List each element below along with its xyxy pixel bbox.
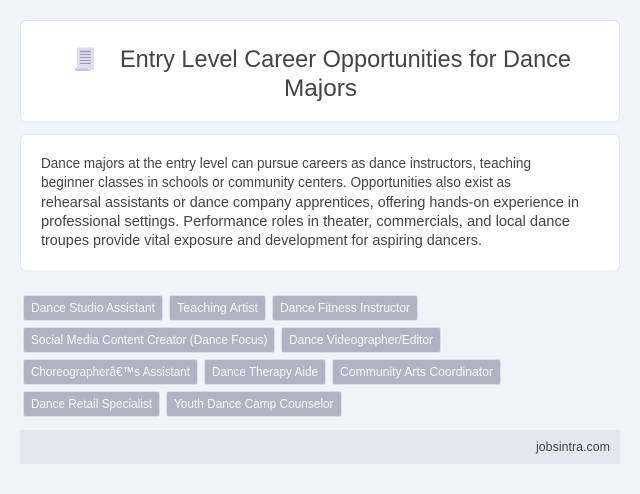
tag: Teaching Artist: Teaching Artist xyxy=(177,301,259,315)
tag: Youth Dance Camp Counselor xyxy=(166,392,342,416)
tag: Social Media Content Creator xyxy=(24,328,274,352)
tag: Choreographer's Assistant: Choreographerâ€™s Assistant xyxy=(31,365,190,379)
title: Majors xyxy=(284,75,357,102)
tag: Dance Fitness Instructor xyxy=(272,296,418,320)
tag: Dance Studio Assistant: Dance Studio Assistant xyxy=(31,301,156,315)
tag: Dance Therapy Aide xyxy=(204,360,326,384)
footer: jobsintra.com xyxy=(535,440,610,454)
panel: description xyxy=(20,134,620,271)
tag: Community Arts Coordinator: Community Arts Coordinator xyxy=(340,365,493,379)
tag: Dance Studio Assistant xyxy=(24,296,162,320)
panel: description: professional settings. Performance roles in theater, commercials, and local dance xyxy=(41,214,570,230)
panel: description: troupes provide vital exposure and development for aspiring dancers. xyxy=(41,233,482,249)
panel: title card xyxy=(20,20,620,122)
tag: Social Media Content Creator: Social Media Content Creator (Dance Focus) xyxy=(31,333,268,347)
tag: Choreographer's Assistant xyxy=(24,360,198,384)
tag: Dance Videographer/Editor: Dance Videographer/Editor xyxy=(289,333,433,347)
tag: Dance Fitness Instructor: Dance Fitness Instructor xyxy=(280,301,410,315)
tag list xyxy=(24,296,500,416)
tag: Youth Dance Camp Counselor: Youth Dance Camp Counselor xyxy=(174,397,334,411)
title xyxy=(120,46,571,102)
icon: document scroll xyxy=(75,48,94,71)
panel: description: Dance majors at the entry level can pursue careers as dance instructors, teaching xyxy=(41,156,531,172)
footer xyxy=(20,430,620,464)
tag: Dance Retail Specialist: Dance Retail Specialist xyxy=(31,397,152,411)
title: Entry Level Career Opportunities for Dance xyxy=(120,46,571,73)
tag: Teaching Artist xyxy=(170,296,266,320)
tag: Dance Therapy Aide: Dance Therapy Aide xyxy=(212,365,318,379)
tag: Dance Retail Specialist xyxy=(24,392,160,416)
panel: description: rehearsal assistants or dance company apprentices, offering hands-on experience in xyxy=(41,195,579,211)
panel: description: beginner classes in schools or community centers. Opportunities also exist as xyxy=(41,175,511,191)
tag: Dance Videographer/Editor xyxy=(282,328,440,352)
tag: Community Arts Coordinator xyxy=(332,360,500,384)
